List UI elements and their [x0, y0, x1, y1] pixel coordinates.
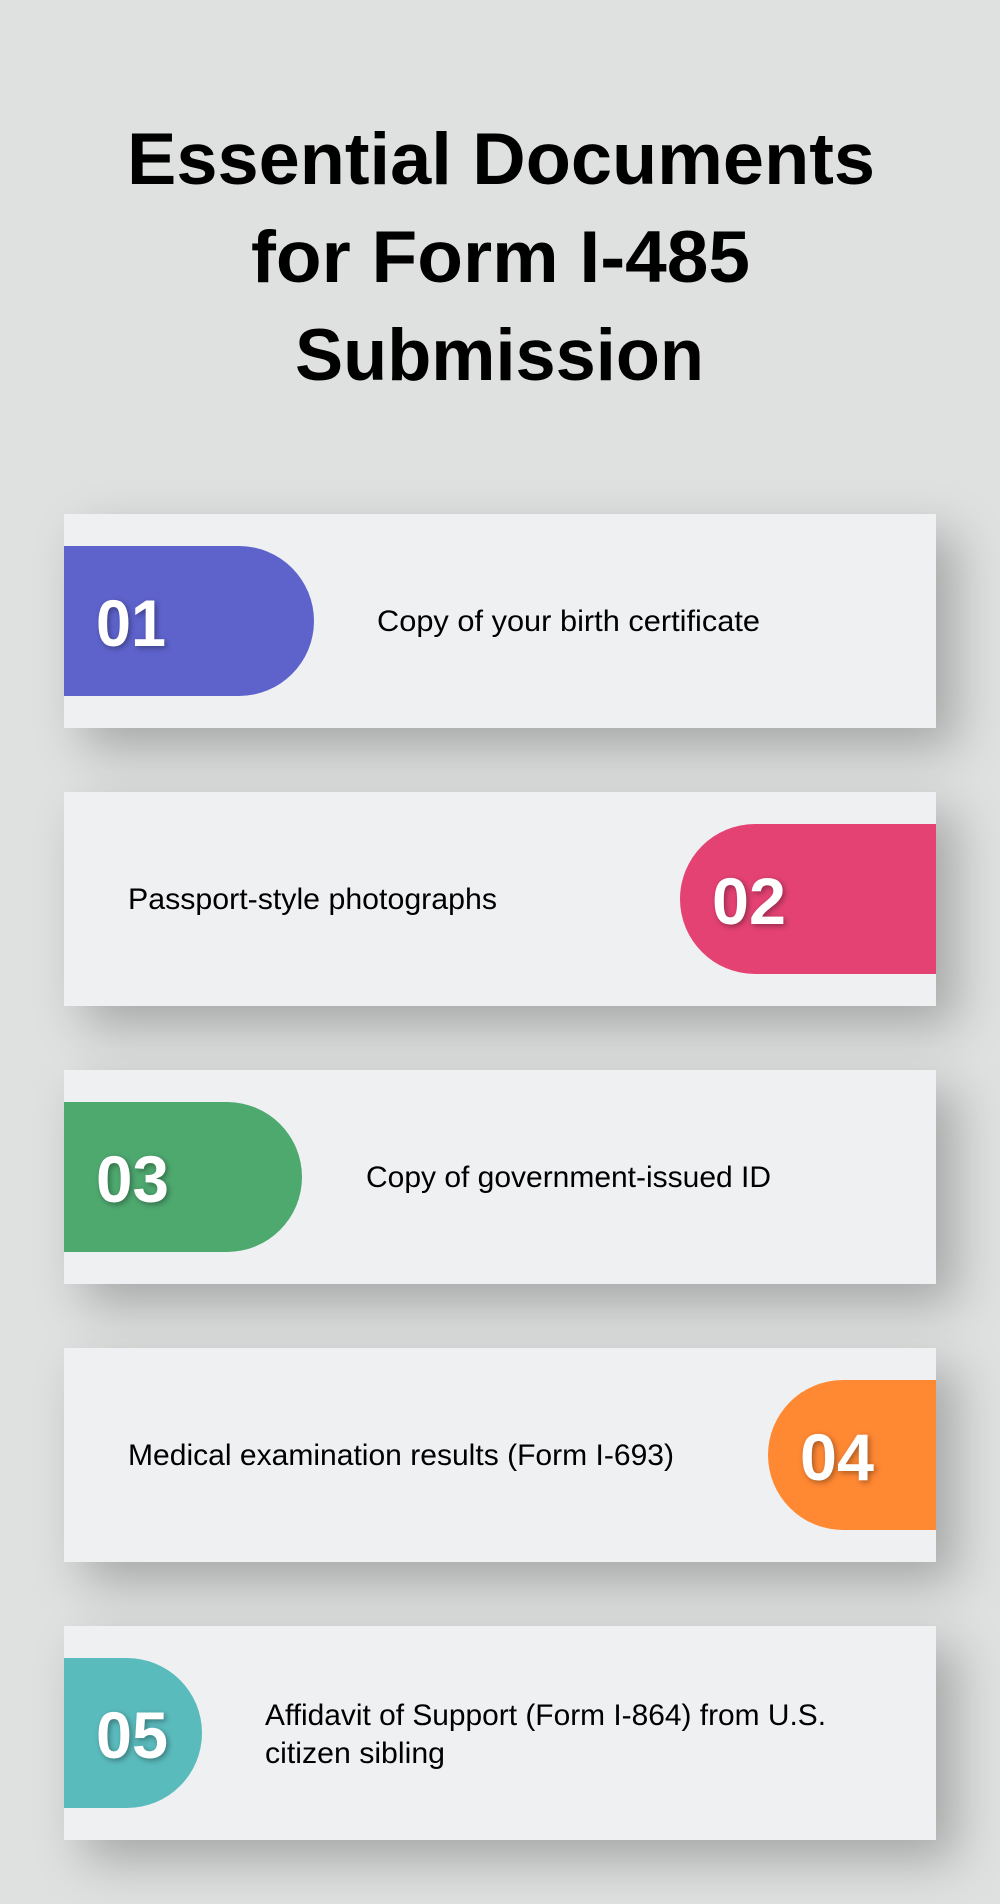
label 2: Passport-style photographs: [128, 883, 497, 916]
pill 01 purple: [64, 546, 314, 696]
label 4: Medical examination results (Form I-693): [128, 1439, 674, 1472]
label 5: [265, 1699, 826, 1770]
pill 04 orange: [768, 1380, 936, 1530]
number 03: 03: [96, 1142, 169, 1216]
title: Essential Documents: [127, 119, 875, 200]
label 5: Affidavit of Support (Form I-864) from U.S.: [265, 1699, 826, 1732]
number 02: 02: [712, 864, 786, 938]
label 3: Copy of government-issued ID: [366, 1161, 771, 1194]
card 1 background: [64, 514, 936, 728]
title: Submission: [295, 315, 704, 396]
title: for Form I-485: [251, 217, 750, 298]
card 3 background: [64, 1070, 936, 1284]
number 05: 05: [96, 1698, 168, 1772]
pill 03 green: [64, 1102, 302, 1252]
label 1: Copy of your birth certificate: [377, 605, 760, 638]
number 01: 01: [96, 586, 166, 660]
pill 05 teal: [64, 1658, 202, 1808]
card 4 background: [64, 1348, 936, 1562]
label 5: citizen sibling: [265, 1737, 445, 1770]
pill 02 pink: [680, 824, 936, 974]
title: [127, 119, 875, 396]
card 5 background: [64, 1626, 936, 1840]
number 04: 04: [800, 1420, 874, 1494]
card 2 background: [64, 792, 936, 1006]
